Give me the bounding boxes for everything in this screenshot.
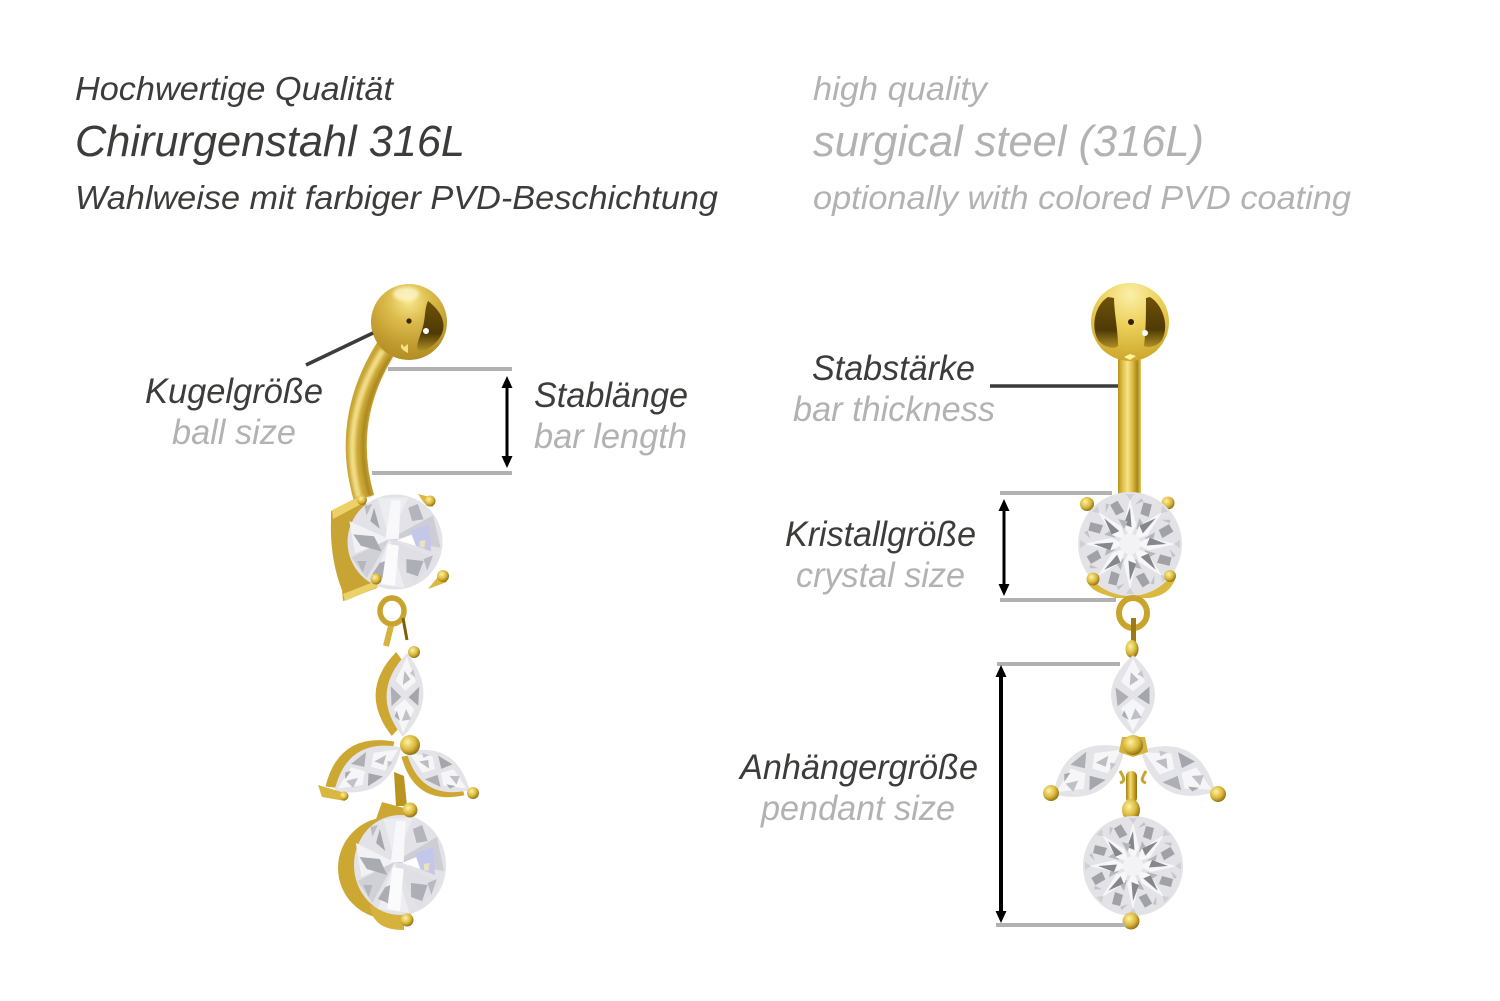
callout: bar thickness: [793, 349, 1118, 429]
jump ring: [1119, 598, 1147, 658]
setting: [1080, 496, 1175, 598]
label: Kugelgröße: Kugelgröße: [145, 372, 323, 411]
jewellery: right front view: [1041, 283, 1226, 930]
crystal: [1078, 492, 1182, 596]
callout: bar length: [372, 369, 688, 473]
label: bar thickness: bar thickness: [793, 390, 995, 429]
heading: high quality: high quality: [813, 70, 990, 107]
leader line: [306, 333, 373, 365]
label: crystal size: crystal size: [796, 556, 965, 595]
bottom bead: [1122, 912, 1140, 930]
callout: pendant size: [738, 664, 1126, 925]
callout: ball size: [145, 333, 373, 452]
pendant prongs: [400, 802, 418, 926]
pendant crystal: [354, 815, 446, 915]
header: German: [75, 70, 719, 216]
heading: Chirurgenstahl 316L: Chirurgenstahl 316L: [75, 118, 465, 166]
extents: [372, 369, 512, 473]
left marquise: [315, 725, 412, 807]
double arrow: [502, 376, 512, 468]
leader line: [990, 384, 1118, 388]
label: Stablänge: Stablänge: [534, 376, 688, 415]
pendant setting: [338, 772, 440, 930]
ball: [1091, 283, 1169, 361]
heading: Hochwertige Qualität: Hochwertige Qualität: [75, 70, 395, 107]
ball: [371, 284, 447, 360]
label: Stabstärke: Stabstärke: [812, 349, 975, 388]
right marquise: [392, 735, 479, 810]
double arrow: [998, 499, 1010, 596]
jewellery: left side view: [315, 284, 479, 930]
text: PVD coating English: optionally with colored PVD coating: [813, 179, 1352, 216]
top marquise: [373, 646, 426, 738]
callout: crystal size: [785, 493, 1116, 600]
prongs over crystal: [1086, 570, 1176, 586]
label: Anhängergröße: Anhängergröße: [738, 748, 978, 787]
setting: [331, 496, 400, 601]
text: PVD coating German: Wahlweise mit farbiger PVD-Beschichtung: [75, 179, 719, 216]
label: Kristallgröße: Kristallgröße: [785, 515, 976, 554]
crystal: [348, 494, 442, 590]
label: pendant size: pendant size: [760, 789, 955, 828]
pendant crystal: [1083, 816, 1183, 916]
straight bar: [1118, 358, 1141, 498]
label: bar length: bar length: [534, 417, 687, 456]
extents: [1000, 493, 1116, 600]
header: English: [813, 70, 1352, 216]
top marquise: [1111, 655, 1155, 735]
centre and tip beads: [1043, 735, 1226, 821]
curved bar: [352, 348, 391, 498]
prongs: [332, 494, 449, 601]
label: ball size: ball size: [172, 413, 296, 452]
double arrow: [996, 665, 1006, 923]
left marquise: [1041, 729, 1137, 813]
jump ring: [380, 598, 407, 646]
heading: surgical steel: surgical steel (316L): [813, 118, 1204, 166]
right marquise: [1130, 731, 1226, 811]
extents: [996, 664, 1126, 925]
